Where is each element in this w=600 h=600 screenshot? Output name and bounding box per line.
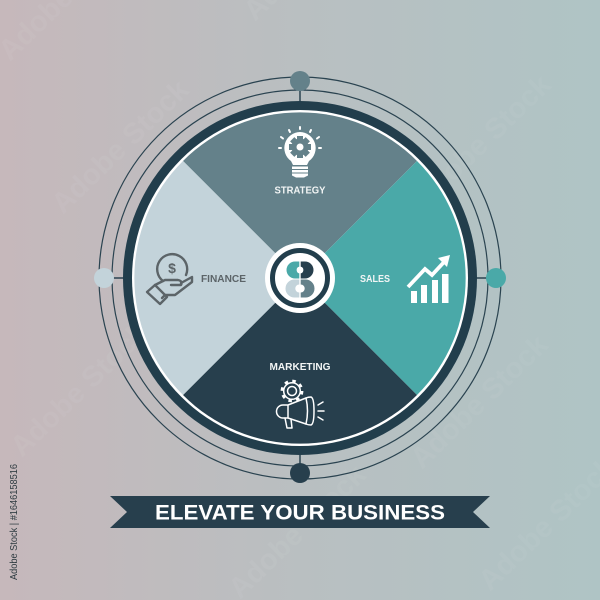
label: strategy: STRATEGY [274,186,326,196]
white ring [132,110,468,446]
node: right [486,268,506,288]
icon: light bulb with gear [279,127,321,178]
icon: hand with coin: $ [168,260,176,276]
node: bottom [290,463,310,483]
icon: megaphone with gear [276,381,324,428]
label: sales: SALES [360,274,390,285]
node: top [290,71,310,91]
text: Adobe Stock [5,316,155,463]
center badge [265,243,335,313]
text: Adobe Stock [46,73,196,220]
icon: growth chart [408,255,450,303]
dark outer ring [123,101,477,455]
stock id text: Adobe Stock | #1646158516 [8,464,20,580]
banner title: ELEVATE YOUR BUSINESS [155,500,445,524]
text: Adobe Stock [198,188,348,335]
segment: sales [300,161,466,395]
text: Adobe Stock [405,328,555,475]
segment: finance [134,161,300,395]
icon: hand with coin [147,254,192,304]
label: finance: FINANCE [201,274,246,285]
text: Adobe Stock [408,68,558,215]
label: marketing: MARKETING [270,362,331,373]
segment: strategy [183,112,417,278]
outer orbit rings [99,77,501,479]
segment: marketing [183,278,417,444]
node: left [94,268,114,288]
ribbon banner [110,496,490,528]
